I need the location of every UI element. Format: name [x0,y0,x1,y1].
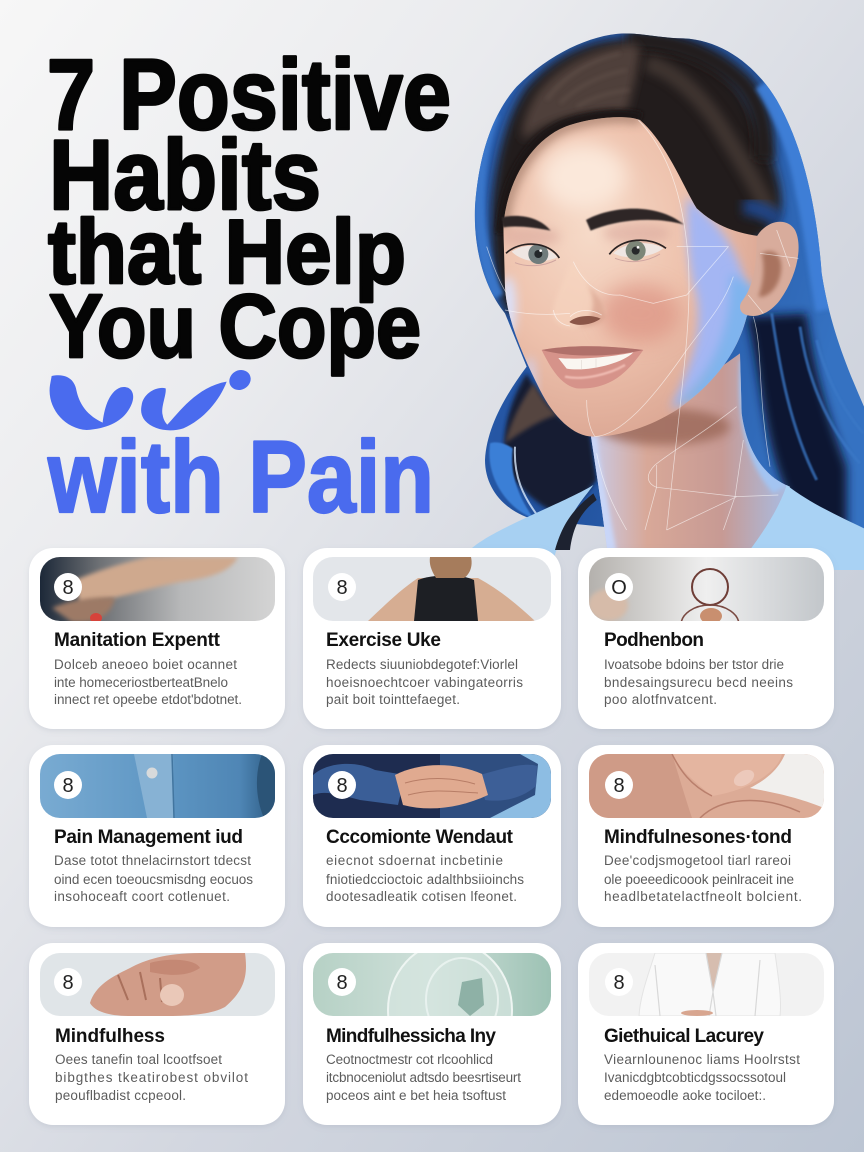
card 3 badge: O [611,577,627,599]
card 3 text [604,657,793,707]
face [503,117,758,436]
facial mapping lines [487,120,798,530]
card 3 text: Ivoatsobe bdoins ber tstor drie [604,657,784,672]
nose [553,260,605,327]
card 1 text: innect ret opeebe etdot'bdotnet. [54,692,242,707]
card 3 badge [605,573,633,601]
left eye [506,244,559,266]
card 8 badge: 8 [336,972,348,994]
title: that Help [48,202,406,303]
card 5 badge: 8 [336,775,348,797]
card 5 heading: Cccomionte Wendaut [326,827,514,848]
card 7: Mindfulhess [29,943,285,1125]
card 6 text: ole poeeedicoook peinlraceit ine [604,872,794,887]
title: Habits [49,119,321,230]
card 4 text: oind ecen toeoucsmisdng eocuos [54,872,253,887]
hair [470,30,864,557]
card 6 text: Dee'codjsmogetool tiarl rareoi [604,853,791,868]
card 2 text: pait boit tointtefaeget. [326,692,460,707]
card 1 badge: 8 [62,577,74,599]
card 8 image: translucent sage spheres [313,953,551,1016]
card 8 text: itcbnoceniolut adtsdo beesrtiseurt [326,1070,521,1085]
card 9 text: edemoeodle aoke tociloet:. [604,1088,766,1103]
card 2 badge: 8 [336,577,348,599]
card 4 heading: Pain Management iud [54,827,243,848]
card 5 image: hands on abdomen [313,754,551,818]
shirt collar [470,485,864,573]
card 7 text [55,1052,248,1103]
card 9 heading: Giethuical Lacurey [604,1026,764,1047]
card 2 text [326,657,523,707]
right eye [609,240,666,262]
card 4: Pain Management iud [29,745,285,927]
card 8: Mindfulhessicha Iny [303,942,561,1125]
card 4 text: insohoceaft coort cotlenuet. [54,889,230,904]
card 3 text: poo alotfnvatcent. [604,692,717,707]
card 8 heading: Mindfulhessicha Iny [326,1026,496,1047]
card 1 heading: Manitation Expentt [54,630,221,651]
card 1 badge [54,573,82,601]
card 9: Giethuical Lacurey [578,943,834,1125]
card 2 text: hoeisnoechtcoer vabingateorris [326,675,523,690]
card 6 heading: Mindfulnesones·tond [604,827,792,848]
card 2 image: woman in black top [313,557,551,621]
card 2 text: Redects siuuniobdegotef:Viorlel [326,657,518,672]
card 9 text: Ivanicdgbtcobticdgssocssotoul [604,1070,786,1085]
eyebrows [502,209,684,231]
card 7 badge: 8 [62,972,74,994]
card 1: Manitation Expentt [29,548,285,729]
card 2: Exercise Uke [303,548,561,729]
card 6 badge [605,771,633,799]
card 5 text: eiecnot sdoernat incbetinie [326,853,503,868]
icon: blue swoosh logo [50,366,254,430]
card 8 text: Ceotnoctmestr cot rlcoohlicd [326,1052,493,1067]
card 9 badge: 8 [613,972,625,994]
card 1 image: arm and hand [40,557,275,623]
card 6 text [604,853,802,904]
title [47,39,451,377]
card 6 text: headlbetatelactfneolt bolcient. [604,889,802,904]
card 2 heading: Exercise Uke [326,630,441,651]
card 6 image: hand close-up [589,754,824,818]
portrait of smiling woman [470,30,864,577]
card 7 text: Oees tanefin toal lcootfsoet [55,1052,222,1067]
card 5 text: dootesadleatik cotisen lfeonet. [326,889,517,904]
card 8 badge [328,968,356,996]
card 3 text: bndesaingsurecu becd neeins [604,675,793,690]
card 9 badge [605,968,633,996]
title: You Cope [49,277,421,377]
card 3 heading: Podhenbon [604,630,704,651]
neck [591,354,790,548]
card 3 image: ring diagram [589,557,824,621]
card 3: Podhenbon [578,548,834,729]
smile [542,346,643,388]
card 7 text: peouflbadist ccpeool. [55,1088,186,1103]
card 5 badge [328,771,356,799]
card 7 badge [54,968,82,996]
title: 7 Positive [47,39,451,151]
card 1 text: Dolceb aneoeo boiet ocannet [54,657,237,672]
subtitle: with Pain: with Pain [47,420,434,534]
card 5 text [326,853,524,904]
card 4 badge [54,771,82,799]
card 9 image: person in white shirt [589,953,824,1016]
card 7 heading: Mindfulhess [55,1026,165,1047]
card 4 badge: 8 [62,775,74,797]
card 4 image: denim shirt [40,754,275,818]
card 6: Mindfulnesones tond [578,745,834,927]
card 4 text: Dase totot thnelacirnstort tdecst [54,853,251,868]
card 4 text [54,853,253,904]
card 8 text: poceos aint e bet heia tsoftust [326,1088,506,1103]
card 2 badge [328,573,356,601]
ear [740,222,799,316]
card 6 badge: 8 [613,775,625,797]
card 1 text [54,657,242,707]
card 1 text: inte homeceriostberteatBnelo [54,675,228,690]
card 9 text: Viearnlounenoc liams Hoolrstst [604,1052,800,1067]
card 9 text [604,1052,800,1103]
card 5: Cccomionte Wendaut [303,745,561,927]
card 7 text: bibgthes tkeatirobest obvilot [55,1070,248,1085]
card 5 text: fniotiedccioctoic adalthbsiioinchs [326,872,524,887]
card 7 image: cupped hands [40,953,275,1016]
card 8 text [326,1052,521,1103]
